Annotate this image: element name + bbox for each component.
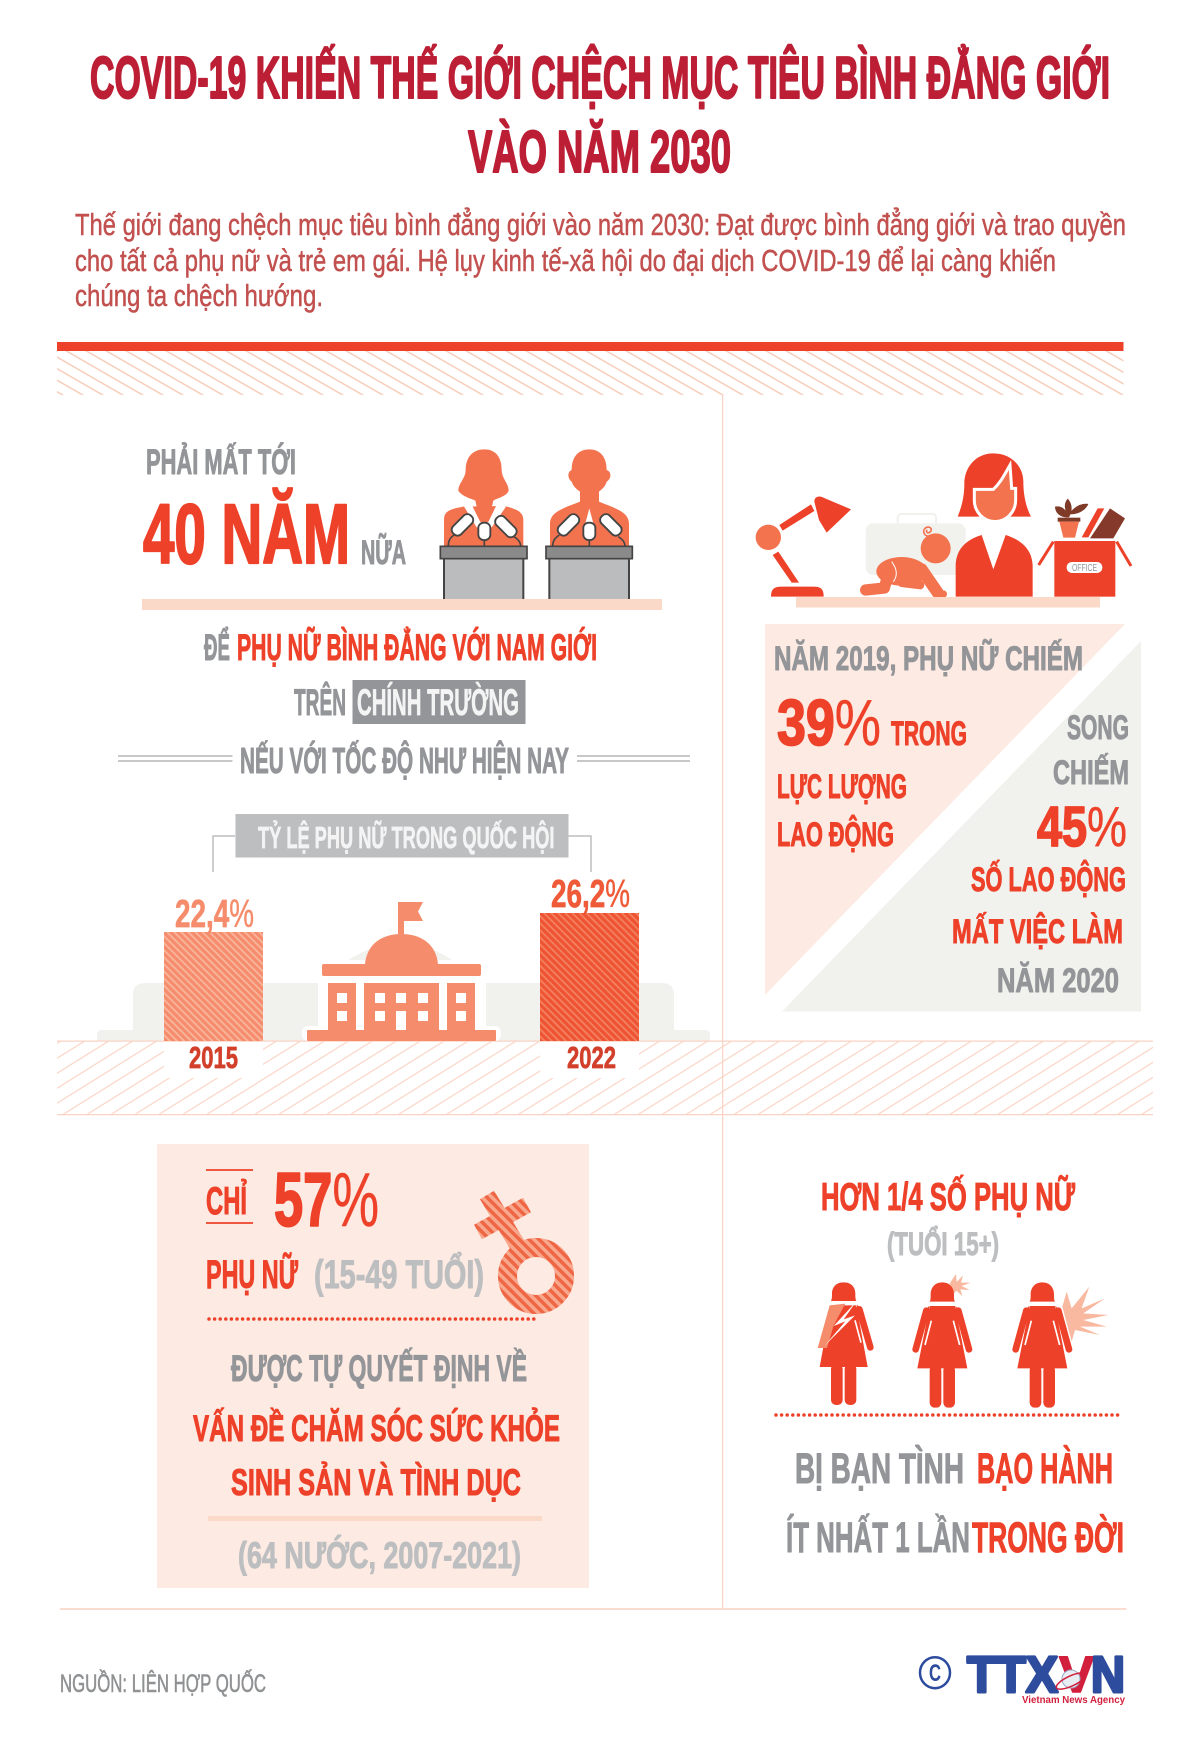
podium floor bar — [142, 599, 662, 610]
text: equality in politics — [118, 626, 690, 781]
logo: TTXVN: Vietnam News Agency — [1022, 1695, 1125, 1706]
bar 2015: 2015 — [189, 1040, 238, 1075]
panel: 40 years heading: 40 NĂM — [143, 487, 350, 581]
text: decision statement — [193, 1348, 560, 1576]
text: equality in politics: TRÊN — [294, 681, 346, 723]
title — [90, 44, 1110, 185]
panel: reproductive health — [157, 1144, 589, 1588]
panel dividers — [60, 395, 1126, 1610]
panel: labour force pink triangle: NĂM 2019, PHỤ NỮ CHIẾM — [774, 640, 1083, 678]
text: decision statement: ĐƯỢC TỰ QUYẾT ĐỊNH VỀ — [231, 1348, 527, 1389]
illustration: lamp, baby, woman, office box — [756, 453, 1131, 597]
panel: labour force pink triangle: LAO ĐỘNG — [777, 815, 894, 854]
bar 2022: 26,2% — [551, 873, 630, 916]
icon: crawling baby — [866, 527, 951, 594]
figure with shoulder injury — [1016, 1282, 1108, 1408]
stat: 57 percent: CHỈ — [206, 1179, 247, 1223]
icons: three women figures — [818, 1274, 1108, 1408]
stat: 57 percent: PHỤ NỮ — [206, 1251, 298, 1297]
bar 2015 — [164, 893, 263, 1075]
grey background city shape — [97, 943, 710, 1041]
bottom hatch band — [57, 1040, 1153, 1115]
text: violence statement: BỊ BẠN TÌNH — [795, 1445, 964, 1493]
panel: intimate partner violence — [776, 1174, 1124, 1562]
bar 2015: 22,4% — [175, 893, 254, 936]
desk bar — [796, 597, 1100, 608]
panel: job losses grey triangle: NĂM 2020 — [997, 962, 1119, 1000]
stat: 57 percent: 57% — [274, 1158, 379, 1243]
source note: NGUỒN: LIÊN HỢP QUỐC — [60, 1668, 266, 1698]
icon: desk lamp — [756, 497, 851, 597]
text: equality in politics: NẾU VỚI TỐC ĐỘ NHƯ HIỆN NAY — [240, 739, 569, 781]
logo: TTXVN: N — [1091, 1646, 1125, 1703]
top red rule with hatch — [57, 342, 1124, 395]
logo: TTXVN: V — [1059, 1646, 1094, 1703]
icon: office box with plant: OFFICE — [1072, 563, 1097, 574]
panel: 40 years heading — [143, 442, 406, 581]
icon: briefcase — [866, 514, 966, 575]
bar 2022 — [540, 873, 639, 1075]
panel: labour force pink triangle: 39% — [777, 686, 881, 759]
text: decision statement: SINH SẢN VÀ TÌNH DỤC — [231, 1462, 521, 1503]
text: equality in politics: PHỤ NỮ BÌNH ĐẲNG VỚI NAM GIỚI — [237, 626, 597, 668]
intro text block: chúng ta chệch hướng. — [75, 278, 323, 313]
icon: politicians at podiums — [440, 449, 632, 599]
panel: labour force pink triangle: TRONG — [891, 715, 967, 753]
panel: job losses grey triangle: CHIẾM — [1053, 754, 1129, 792]
text: violence statement — [786, 1445, 1124, 1562]
panel: job losses grey triangle: SONG — [1067, 709, 1129, 747]
stat: 57 percent — [206, 1158, 484, 1297]
panel: labour force pink triangle — [765, 624, 1125, 995]
text: decision statement: (64 NƯỚC, 2007-2021) — [238, 1534, 521, 1576]
panel: job losses grey triangle: 45% — [1037, 795, 1127, 859]
logo: TTXVN: C — [929, 1660, 941, 1687]
panel: job losses grey triangle: MẤT VIỆC LÀM — [952, 913, 1123, 951]
bar 2022: 2022 — [567, 1040, 616, 1075]
panel: 40 years heading: PHẢI MẤT TỚI — [146, 442, 296, 482]
logo: TTXVN — [920, 1646, 1125, 1706]
panel: labour force pink triangle: LỰC LƯỢNG — [777, 768, 907, 806]
chart heading — [213, 814, 591, 872]
icon: parliament building — [302, 902, 501, 1041]
text: equality in politics: CHÍNH TRƯỜNG — [357, 681, 519, 723]
text: violence statement: ÍT NHẤT 1 LẦN — [786, 1514, 970, 1562]
panel: intimate partner violence: HƠN 1/4 SỐ PHỤ NỮ — [821, 1174, 1075, 1219]
chart: women in parliament — [164, 814, 639, 1075]
title: VÀO NĂM 2030 — [468, 119, 731, 185]
intro text block — [75, 206, 1126, 313]
figure with lightning — [818, 1282, 870, 1405]
panel: intimate partner violence: (TUỔI 15+) — [887, 1226, 999, 1262]
panel: 40 years heading: NỮA — [361, 534, 406, 572]
icon: venus symbol — [478, 1195, 564, 1304]
panel: job losses grey triangle — [782, 641, 1141, 1012]
figure with head injury — [916, 1274, 971, 1408]
logo: TTXVN: TTX — [967, 1646, 1058, 1703]
text: equality in politics: ĐỂ — [204, 626, 230, 668]
stat: 57 percent: (15-49 TUỔI) — [314, 1250, 484, 1297]
icon: woman — [956, 453, 1033, 597]
text: decision statement: VẤN ĐỀ CHĂM SÓC SỨC KHỎE — [193, 1407, 560, 1449]
chart heading: TỶ LỆ PHỤ NỮ TRONG QUỐC HỘI — [258, 819, 554, 855]
icon: office box with plant — [1039, 499, 1131, 597]
